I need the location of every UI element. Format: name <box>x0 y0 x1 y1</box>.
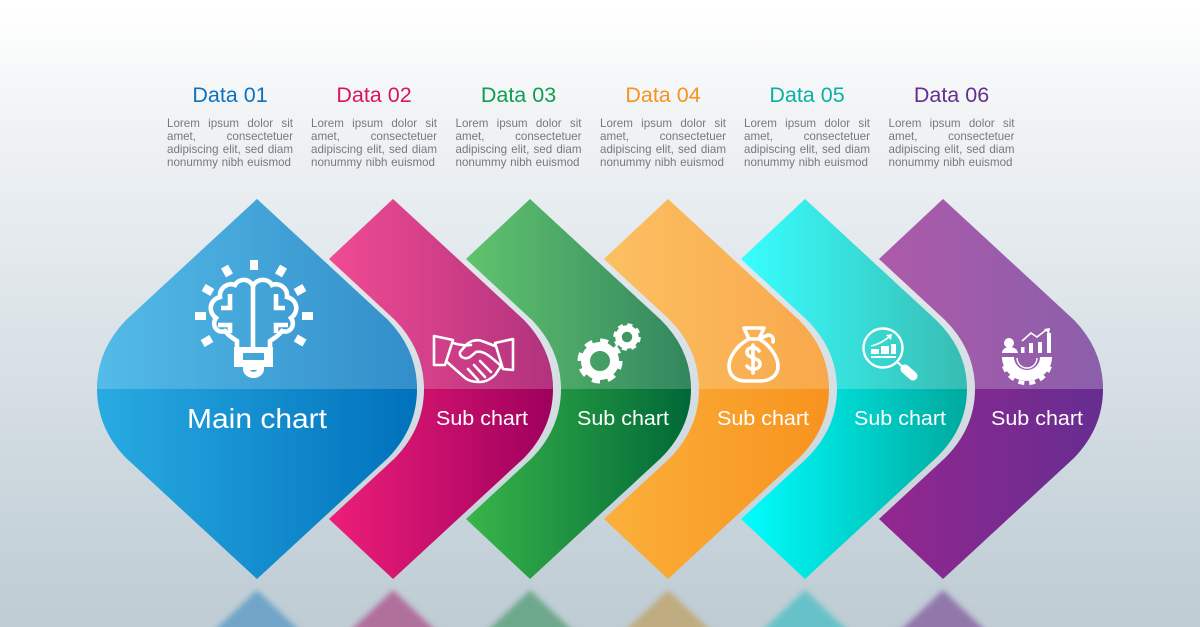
heading column: Data 04: Data 04 <box>625 83 701 107</box>
heading column: Data 01 <box>167 83 293 168</box>
heading column: Data 04 <box>600 83 726 168</box>
heading column: Data 05 <box>744 83 870 168</box>
heading column: Data 02: nonummy nibh euismod <box>311 156 435 168</box>
heading column: Data 03 <box>456 83 582 168</box>
heading column: Data 02: Data 02 <box>336 83 412 107</box>
heading column: Data 06: nonummy nibh euismod <box>888 156 1012 168</box>
heading column: Data 03: adipiscing elit, sed diam <box>456 142 582 156</box>
panel: sub chart pink <box>329 199 553 579</box>
reflections of the shape tips <box>194 590 1006 627</box>
panel: main chart <box>97 199 417 579</box>
icon: magnifier with chart <box>864 328 913 376</box>
heading column: Data 01: Data 01 <box>192 83 268 107</box>
heading column: Data 04: nonummy nibh euismod <box>600 156 724 168</box>
label: Main chart: Main chart <box>187 403 327 434</box>
heading column: Data 02: amet, consectetuer <box>311 130 437 142</box>
heading column: Data 05: amet, consectetuer <box>744 130 870 142</box>
label: Sub chart: Sub chart <box>717 407 809 430</box>
heading column: Data 04: Lorem ipsum dolor sit <box>600 116 726 130</box>
heading column: Data 01: nonummy nibh euismod <box>167 156 291 168</box>
heading column: Data 06: amet, consectetuer <box>888 130 1014 142</box>
heading column: Data 03: Data 03 <box>481 83 556 107</box>
heading column: Data 05: Lorem ipsum dolor sit <box>744 116 870 130</box>
label: Sub chart: Sub chart <box>991 407 1083 430</box>
icon: person, bar chart and gear <box>1002 328 1052 383</box>
label: Sub chart: Sub chart <box>854 407 946 430</box>
heading column: Data 04: adipiscing elit, sed diam <box>600 142 726 156</box>
heading column: Data 05: Data 05 <box>769 83 845 107</box>
panel: sub chart orange <box>604 199 829 579</box>
label: Sub chart: Sub chart <box>577 407 669 430</box>
heading column: Data 03: amet, consectetuer <box>456 130 582 142</box>
heading column: Data 06: Lorem ipsum dolor sit <box>888 116 1014 130</box>
heading column: Data 05: adipiscing elit, sed diam <box>744 142 870 156</box>
heading column: Data 02: adipiscing elit, sed diam <box>311 142 437 156</box>
panel: sub chart teal <box>741 199 967 579</box>
icon: brain light bulb <box>195 260 313 378</box>
heading column: Data 03: Lorem ipsum dolor sit <box>456 116 582 130</box>
label: Sub chart: Sub chart <box>436 407 528 430</box>
panel: sub chart purple <box>879 199 1103 579</box>
heading column: Data 02: Lorem ipsum dolor sit <box>311 116 437 130</box>
heading column: Data 02 <box>311 83 437 168</box>
heading column: Data 01: amet, consectetuer <box>167 130 293 142</box>
heading column: Data 06: adipiscing elit, sed diam <box>888 142 1014 156</box>
heading column: Data 03: nonummy nibh euismod <box>456 156 580 168</box>
icon: handshake <box>434 336 513 382</box>
heading column: Data 01: Lorem ipsum dolor sit <box>167 116 293 130</box>
icon: gears <box>580 325 639 381</box>
heading column: Data 05: nonummy nibh euismod <box>744 156 868 168</box>
heading column: Data 01: adipiscing elit, sed diam <box>167 142 293 156</box>
panel: sub chart green <box>466 199 691 579</box>
heading column: Data 06 <box>888 83 1014 168</box>
heading column: Data 06: Data 06 <box>914 83 989 107</box>
icon: money bag <box>729 328 778 381</box>
heading column: Data 04: amet, consectetuer <box>600 130 726 142</box>
